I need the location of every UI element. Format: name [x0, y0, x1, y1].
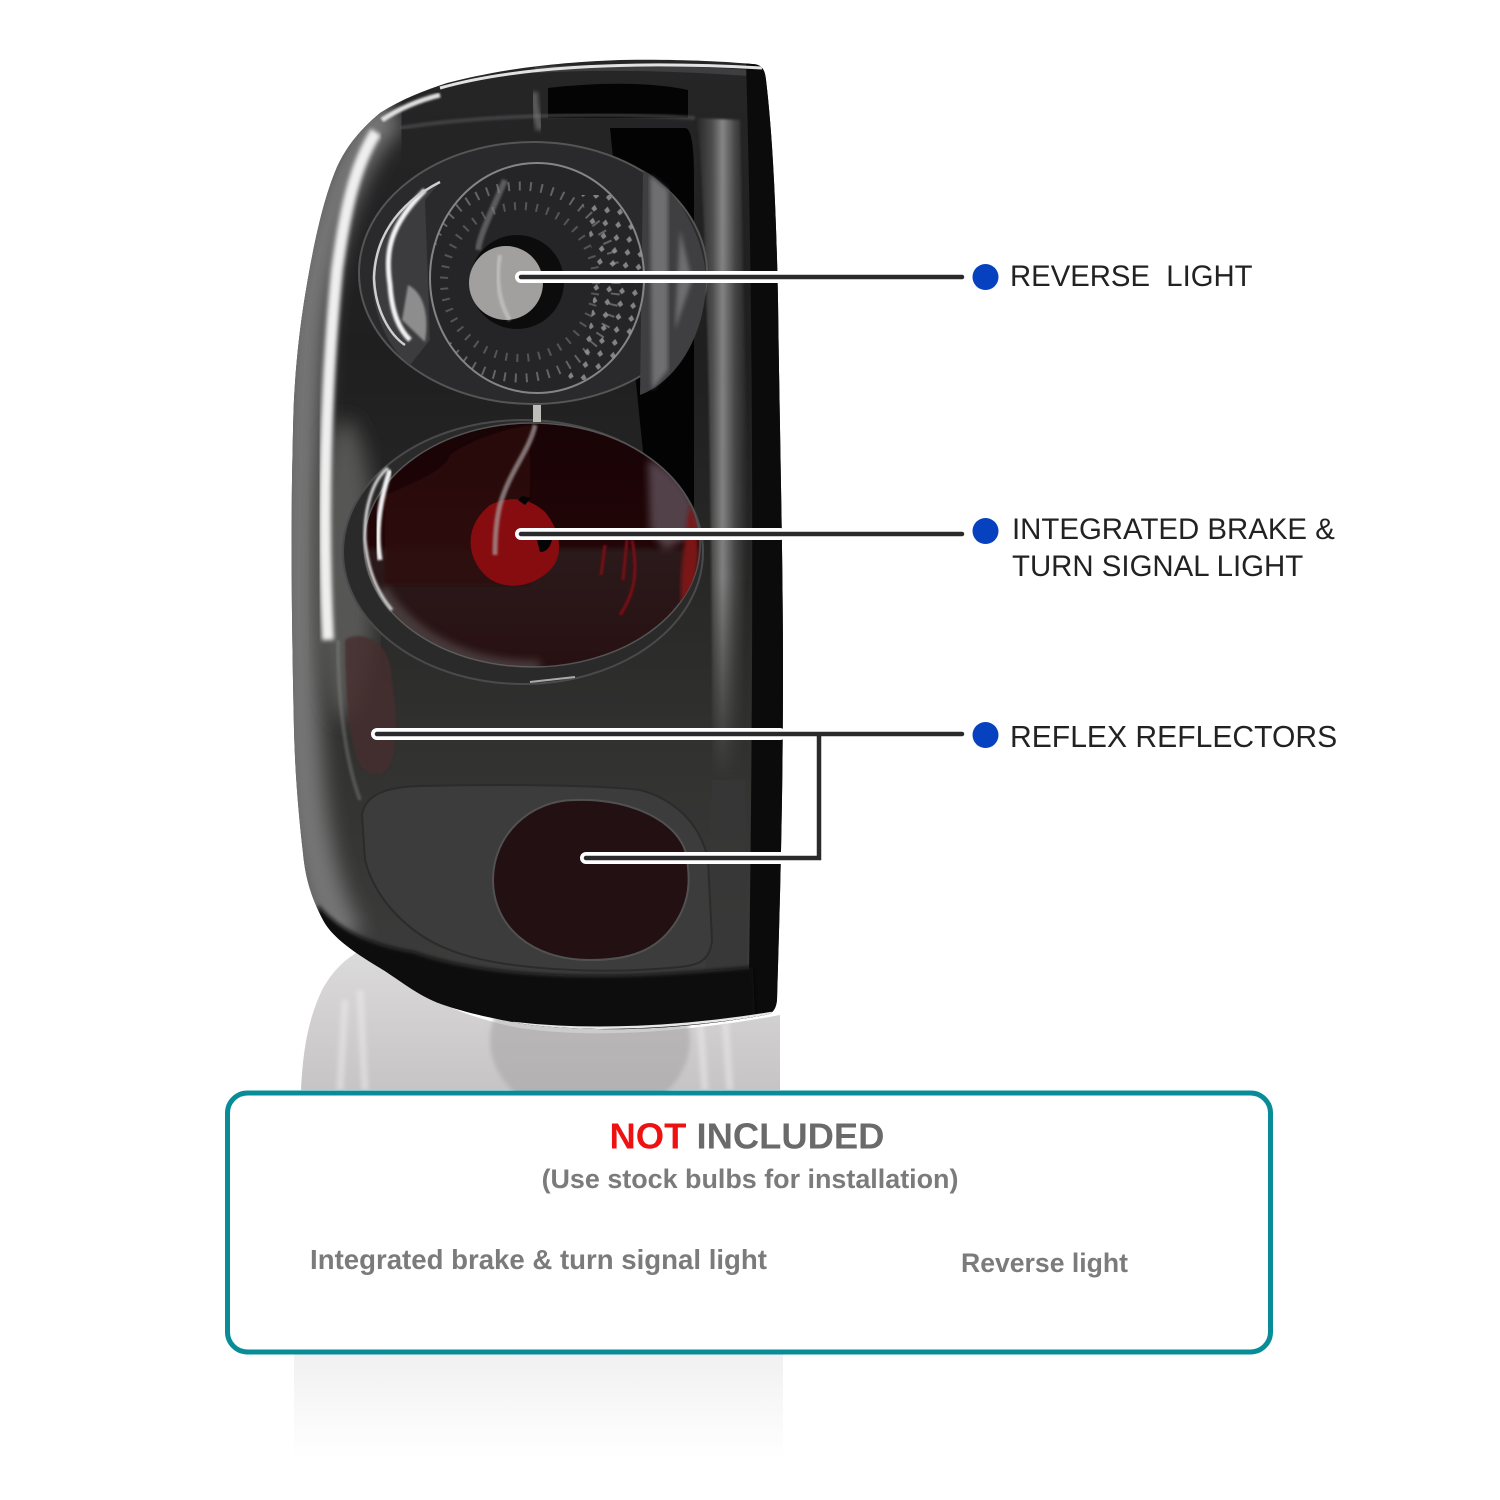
reverse light lens: [359, 142, 707, 404]
subheading: stock bulbs: (Use stock bulbs for installation): [542, 1164, 958, 1194]
callout lines: [377, 277, 962, 858]
top and bottom gloss edges: [440, 65, 762, 88]
right dark rim: [746, 63, 783, 1018]
legend dot: reverse light: [972, 264, 998, 290]
soft grey outer band on left edge: [299, 110, 392, 940]
lamp housing: [285, 55, 790, 1040]
label: reflex reflectors: REFLEX REFLECTORS: [1010, 721, 1337, 754]
note: brake and turn signal: Integrated brake & turn signal light: [310, 1244, 767, 1275]
note: reverse light: Reverse light: [961, 1248, 1128, 1278]
heading: not included: NOT INCLUDED: [610, 1116, 884, 1156]
panel: not included: [228, 1093, 1270, 1352]
upper black recess: [548, 84, 688, 118]
bottom dark rim: [316, 904, 756, 1030]
right chrome column: [698, 118, 746, 756]
label: reverse light: REVERSE LIGHT: [1010, 260, 1253, 293]
label: integrated brake and turn signal light: TURN SIGNAL LIGHT: [1012, 550, 1303, 583]
reflection below the lamp: [294, 950, 783, 1460]
label: integrated brake and turn signal light: INTEGRATED BRAKE &: [1012, 513, 1335, 546]
tail light product illustration: [225, 60, 1336, 1398]
legend dot: reflex reflectors: [972, 722, 998, 748]
lower reflex reflector: [493, 800, 689, 960]
brake and turn signal lens: [343, 405, 703, 684]
lower reflector panel: [362, 785, 712, 971]
legend dot: brake and turn signal: [972, 518, 998, 544]
bright left streak: [325, 132, 376, 640]
soft grey tone left of brake lens: [315, 420, 375, 720]
side reflex reflector: [345, 636, 396, 774]
